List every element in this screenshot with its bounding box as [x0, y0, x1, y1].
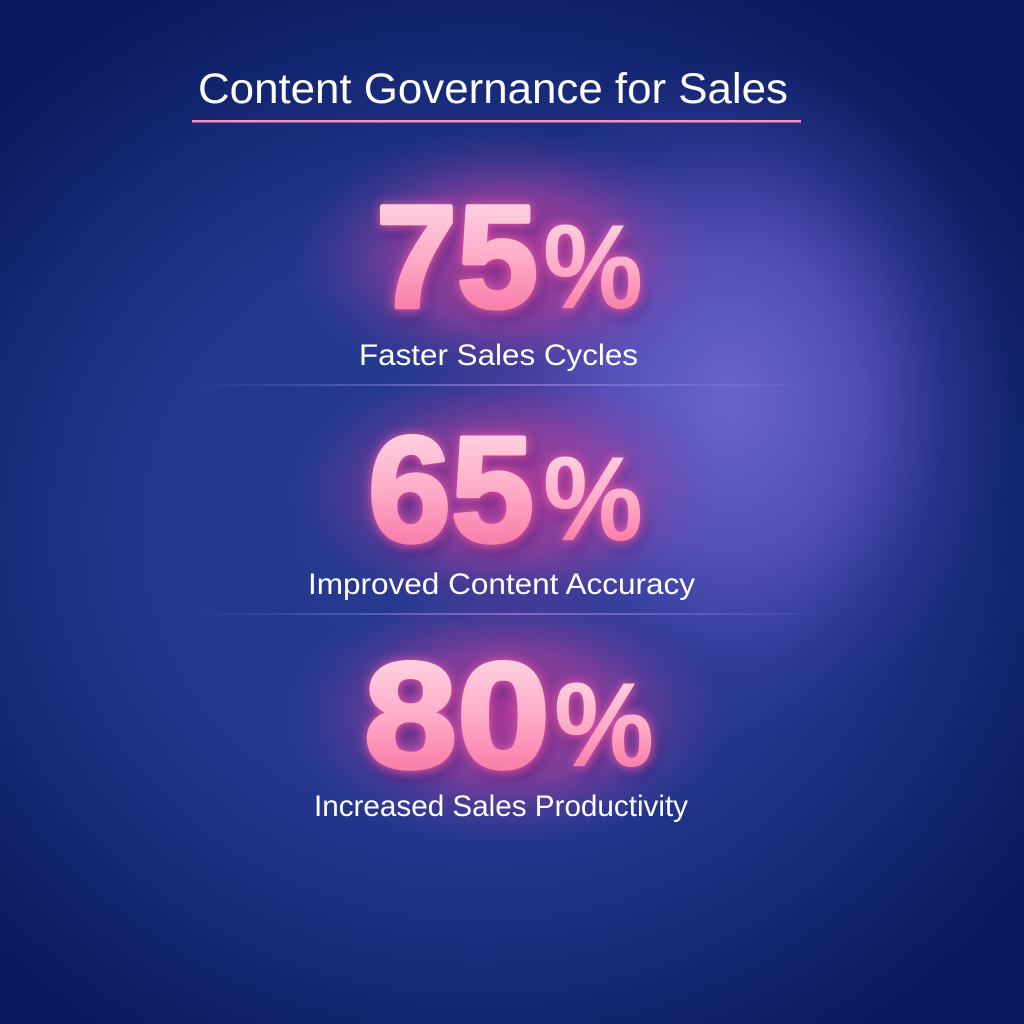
label: Increased Sales Productivity: [314, 790, 688, 823]
number 75%: [376, 175, 643, 338]
title underline: [192, 120, 801, 122]
number 65%: 65: [368, 405, 534, 573]
label: Faster Sales Cycles: [359, 339, 638, 372]
stat: 80% increased sales productivity: [288, 585, 728, 845]
title: Content Governance for Sales: [198, 65, 788, 113]
label: Improved Content Accuracy: [308, 568, 695, 601]
stat: 75% faster sales cycles: [293, 128, 723, 388]
number 65%: [368, 405, 643, 573]
number 80%: 80: [364, 631, 550, 799]
stat: 65% improved content accuracy: [293, 360, 723, 620]
number 80%: [364, 631, 654, 799]
number 75%: %: [543, 200, 643, 334]
number 80%: %: [554, 658, 654, 792]
number 75%: 75: [376, 175, 538, 338]
number 65%: %: [543, 432, 643, 566]
